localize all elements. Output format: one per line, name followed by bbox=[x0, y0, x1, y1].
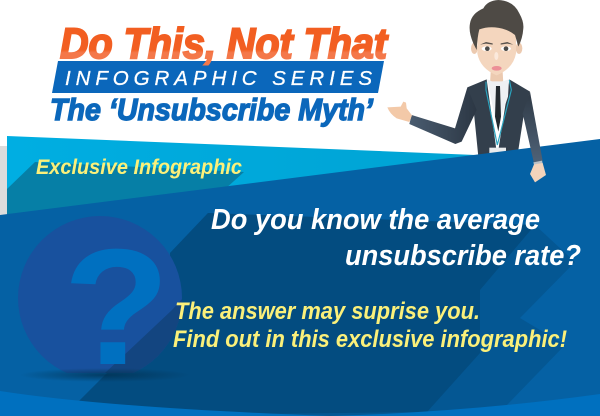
presenter forearm and fist bbox=[523, 92, 546, 182]
presenter figure body bbox=[387, 0, 530, 157]
series banner bbox=[52, 61, 384, 93]
brows bbox=[480, 42, 493, 45]
circle shade bbox=[105, 298, 183, 373]
ground shadow bbox=[20, 368, 190, 382]
open hand bbox=[387, 102, 412, 122]
question circle bbox=[18, 216, 182, 381]
neck bbox=[490, 67, 503, 93]
lanyard bbox=[486, 80, 511, 145]
dark blue panel bbox=[0, 139, 600, 416]
series text: INFOGRAPHIC SERIES bbox=[65, 67, 372, 90]
long shadows bbox=[77, 213, 575, 416]
circle bbox=[18, 216, 182, 380]
question line 2: unsubscribe rate? bbox=[345, 240, 581, 272]
fist bbox=[530, 163, 546, 182]
question line 1: Do you know the average bbox=[211, 204, 540, 236]
face bbox=[477, 27, 516, 75]
bottom band bbox=[0, 391, 600, 416]
eyes bbox=[482, 46, 492, 51]
title: Do This, Not That: Do This, Not That bbox=[60, 20, 389, 68]
subtitle: The ‘Unsubscribe Myth’ bbox=[50, 92, 373, 127]
pointing arm bbox=[409, 87, 477, 144]
banner shadow bbox=[7, 162, 244, 240]
side strip bbox=[0, 146, 8, 216]
answer line 1: The answer may suprise you. bbox=[175, 298, 480, 325]
cyan banner bbox=[7, 136, 600, 240]
question mark: ? bbox=[63, 215, 170, 400]
shirt bbox=[487, 79, 509, 118]
badge bbox=[489, 148, 506, 154]
answer line 2: Find out in this exclusive infographic! bbox=[173, 326, 567, 353]
label: exclusive infographic: Exclusive Infographic bbox=[36, 156, 242, 179]
hair bbox=[470, 0, 523, 50]
nose bbox=[494, 52, 498, 60]
mouth bbox=[492, 66, 502, 71]
jacket bbox=[467, 79, 530, 157]
cuff bbox=[533, 161, 543, 165]
forearm bbox=[523, 92, 543, 163]
tie bbox=[495, 86, 501, 132]
ears bbox=[471, 43, 478, 54]
